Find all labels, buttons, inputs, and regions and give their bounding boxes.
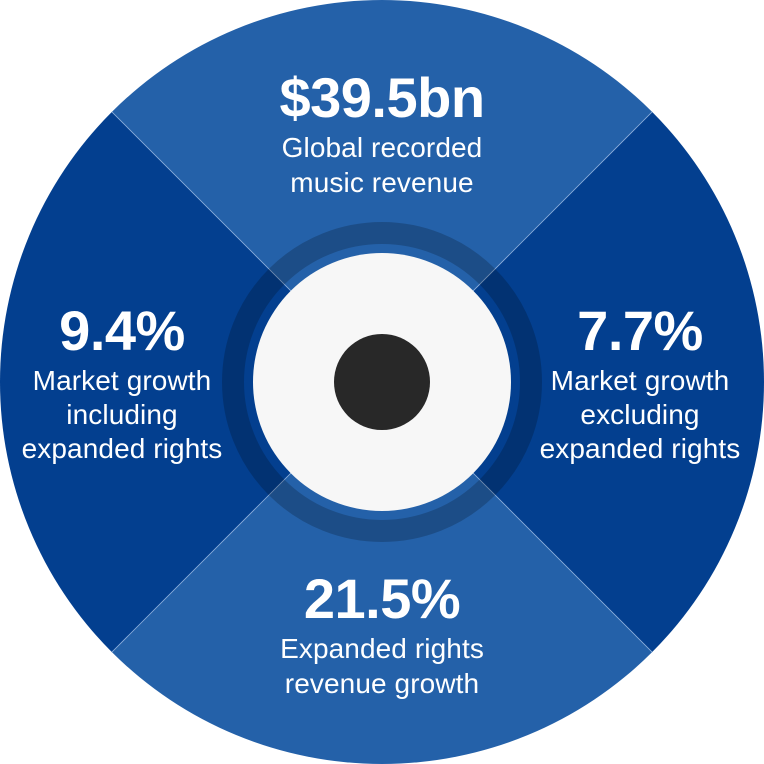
text: right: excluding — [580, 399, 700, 430]
text: bottom — [280, 567, 484, 699]
center ring — [233, 233, 531, 531]
sector: bottom — [112, 474, 652, 764]
text: top: Global recorded — [282, 132, 482, 163]
text: right: 7.7% — [577, 299, 703, 362]
text: left: including — [66, 399, 178, 430]
text: left: 9.4% — [59, 299, 185, 362]
sector: top — [112, 0, 652, 290]
text: top: $39.5bn — [279, 66, 485, 129]
text: top — [279, 66, 485, 198]
text: right: Market growth — [551, 365, 729, 396]
text: bottom: revenue growth — [285, 668, 479, 699]
sector: right — [474, 112, 764, 652]
text: bottom: 21.5% — [304, 567, 460, 630]
white label disc — [253, 253, 511, 511]
text: bottom: Expanded rights — [280, 633, 484, 664]
text: right — [540, 299, 740, 464]
sector: left — [0, 112, 290, 652]
text: left: expanded rights — [22, 433, 222, 464]
spindle hole — [334, 334, 430, 430]
text: left — [22, 299, 222, 464]
text: top: music revenue — [290, 167, 474, 198]
text: right: expanded rights — [540, 433, 740, 464]
text: left: Market growth — [33, 365, 211, 396]
